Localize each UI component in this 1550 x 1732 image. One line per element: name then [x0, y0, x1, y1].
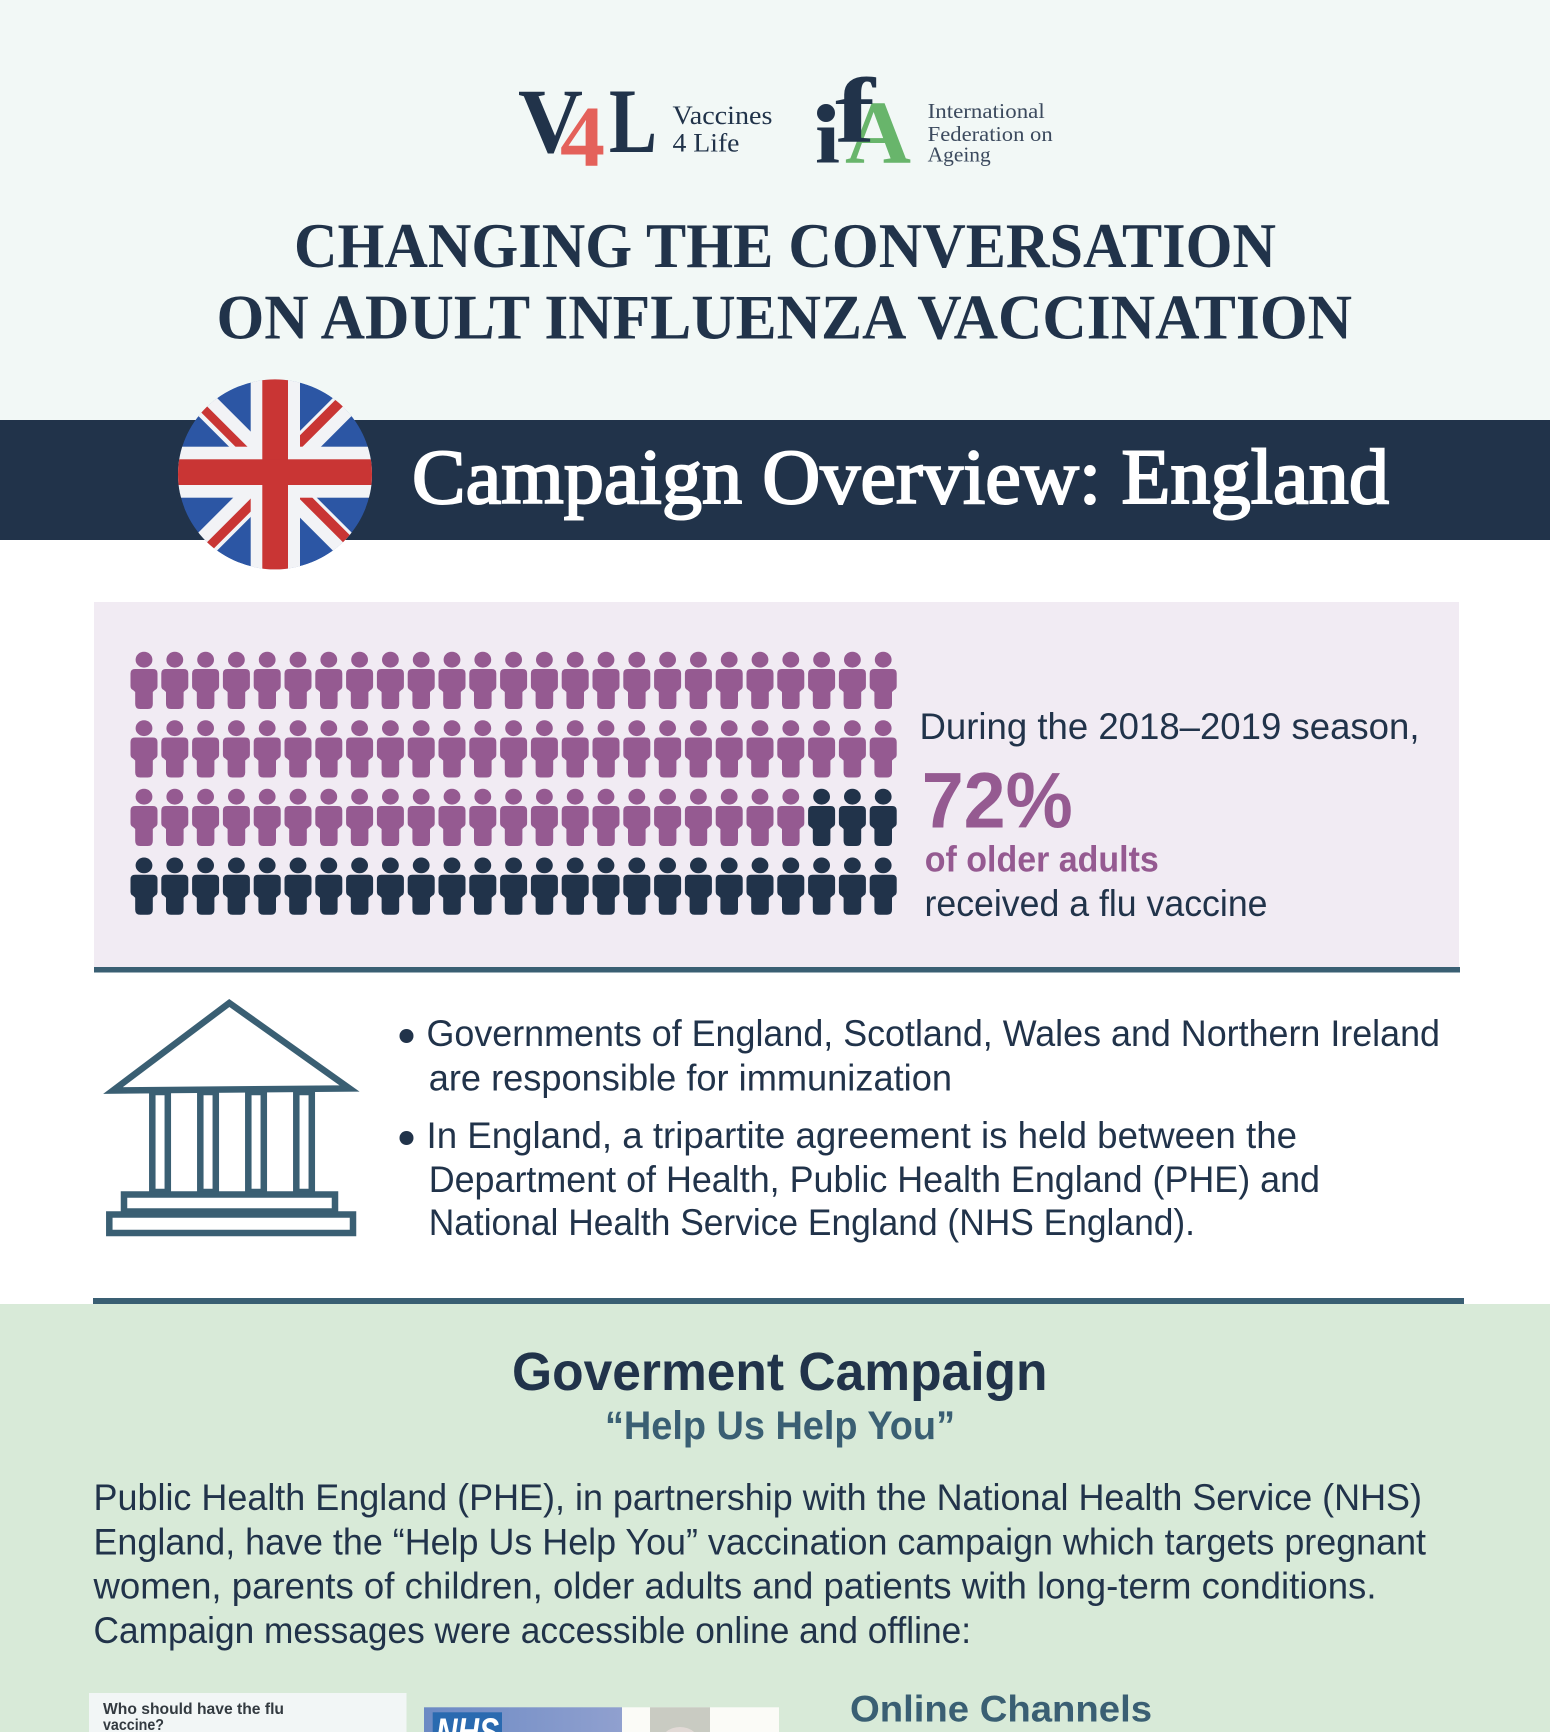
campaign description: England, have the “Help Us Help You” vaccination campaign which targets pregnant: [94, 1522, 1427, 1562]
pictogram: 72 of 100 older adults vaccinated: [130, 652, 897, 915]
title: CHANGING THE CONVERSATION: [294, 210, 1276, 281]
web page screenshot: who should have the flu vaccine: Who should have the flu: [103, 1701, 284, 1718]
logo: International Federation on Ageing: [815, 60, 1053, 183]
campaign description: [93, 1477, 1427, 1651]
logo: International Federation on Ageing: Ageing: [928, 143, 991, 167]
campaign heading: Goverment Campaign: [512, 1342, 1048, 1402]
web page screenshot: who should have the flu vaccine: [89, 1693, 406, 1732]
governance bullet list: National Health Service England (NHS England).: [429, 1202, 1195, 1243]
governance bullet list: In England, a tripartite agreement is held between the: [426, 1115, 1297, 1156]
campaign description: women, parents of children, older adults and patients with long-term conditions.: [93, 1566, 1377, 1607]
statistic text: received a flu vaccine: [924, 883, 1268, 924]
logo: Vaccines 4 Life: Vaccines: [672, 101, 772, 130]
NHS campaign poster: [424, 1707, 779, 1732]
logo: Vaccines 4 Life: L: [609, 70, 657, 172]
banner heading: Campaign Overview: England: [412, 433, 1389, 520]
title: [216, 210, 1352, 353]
governance bullet list: Department of Health, Public Health England (PHE) and: [429, 1159, 1320, 1200]
statistic text: [920, 706, 1420, 924]
logo: Vaccines 4 Life: 4 Life: [672, 129, 740, 158]
logo: International Federation on Ageing: f: [835, 60, 877, 162]
statistic text: of older adults: [925, 839, 1159, 880]
header background: [0, 0, 1550, 420]
governance bullet list: [400, 1013, 1440, 1243]
logo: International Federation on Ageing: A: [845, 84, 911, 183]
online channels heading: Online Channels: [850, 1689, 1152, 1730]
banner: [0, 420, 1550, 540]
logo: International Federation on Ageing: Federation on: [928, 122, 1053, 146]
campaign slogan: “Help Us Help You”: [605, 1404, 955, 1448]
icon: UK flag: [178, 379, 372, 570]
logo: Vaccines 4 Life: 4: [560, 88, 605, 185]
panel: government campaign: [0, 1298, 1550, 1732]
campaign description: Public Health England (PHE), in partnership with the National Health Service (NHS): [94, 1477, 1422, 1518]
governance bullet list: Governments of England, Scotland, Wales and Northern Ireland: [426, 1013, 1440, 1054]
statistic text: During the 2018–2019 season,: [920, 706, 1420, 747]
logo: International Federation on Ageing: International: [928, 99, 1045, 123]
logo: International Federation on Ageing: ı: [815, 96, 840, 180]
title: ON ADULT INFLUENZA VACCINATION: [216, 282, 1352, 353]
logo: Vaccines 4 Life: V: [518, 70, 583, 172]
icon: government building: [109, 1003, 353, 1233]
statistic text: 72%: [922, 756, 1073, 845]
logo: Vaccines 4 Life: [518, 70, 772, 185]
panel: vaccination rate: [94, 602, 1459, 967]
governance bullet list: are responsible for immunization: [429, 1058, 952, 1098]
campaign description: Campaign messages were accessible online and offline:: [94, 1610, 971, 1651]
